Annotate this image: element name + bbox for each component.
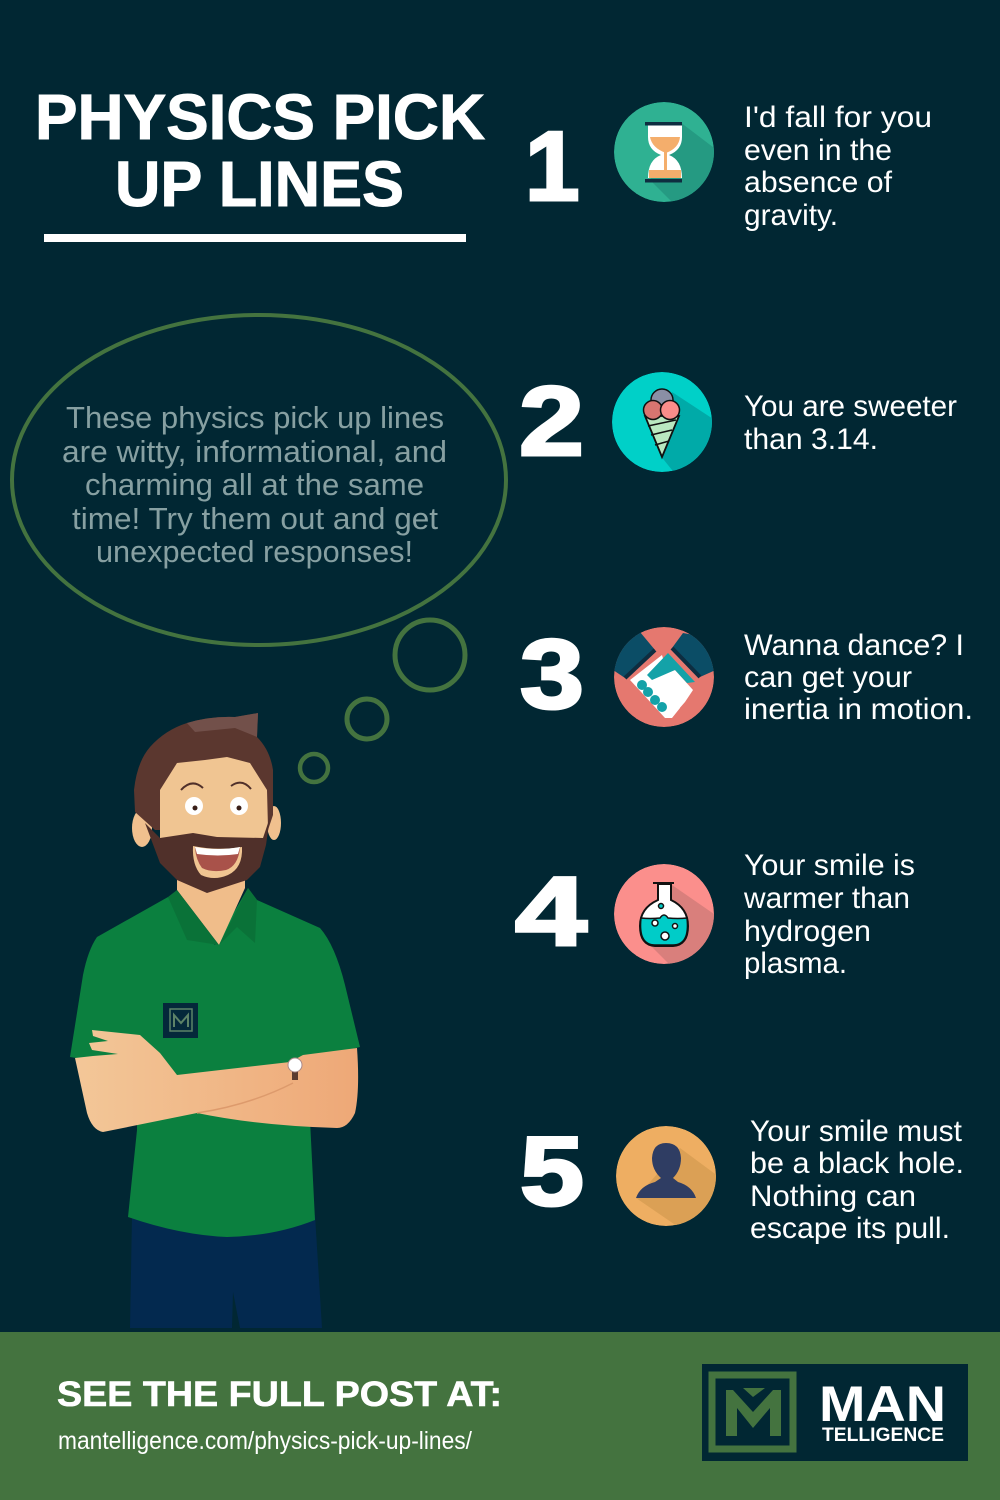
logo: TELLIGENCE: [822, 1425, 944, 1446]
number 3: 3: [520, 619, 584, 729]
shirt badge: [163, 1003, 198, 1038]
footer: [0, 1332, 1000, 1500]
text 3: [744, 629, 973, 726]
title: PHYSICS PICK: [35, 81, 485, 153]
ears: [132, 809, 152, 847]
bubble text: charming all at the same: [85, 467, 424, 502]
character: [70, 713, 360, 1328]
text 4: [743, 849, 915, 980]
watch: [288, 1058, 302, 1080]
text 5: [750, 1115, 964, 1245]
text 4: hydrogen: [744, 915, 871, 948]
bubble text: time! Try them out and get: [72, 501, 438, 536]
item 5: [520, 1115, 964, 1245]
bubble text: These physics pick up lines: [66, 400, 444, 435]
thought bubble: [12, 315, 506, 645]
text 5: Nothing can: [750, 1180, 916, 1213]
bubble text: [62, 400, 447, 569]
number 2: 2: [519, 366, 584, 476]
shirt: [70, 888, 360, 1237]
arm crease: [197, 1083, 293, 1113]
text 1: I'd fall for you: [744, 101, 932, 134]
mouth: [193, 846, 242, 878]
icon: ice cream: [612, 372, 712, 472]
text 3: Wanna dance? I: [744, 629, 964, 662]
text 3: can get your: [744, 661, 912, 694]
bubble text: are witty, informational, and: [62, 434, 447, 469]
text 4: Your smile is: [744, 849, 915, 882]
title: [35, 81, 485, 220]
item 3: [520, 619, 973, 729]
footer heading: SEE THE FULL POST AT:: [57, 1375, 502, 1414]
number 5: 5: [520, 1116, 584, 1226]
crossed arms: [75, 1030, 358, 1132]
icon: person silhouette: [616, 1126, 716, 1226]
title underline: [44, 234, 466, 242]
text 3: inertia in motion.: [744, 693, 973, 726]
text 1: [744, 101, 932, 232]
text 4: warmer than: [743, 882, 910, 915]
text 4: plasma.: [744, 947, 847, 980]
text 5: escape its pull.: [750, 1212, 950, 1245]
hair: [134, 713, 273, 830]
text 1: absence of: [744, 166, 893, 199]
collar: [168, 888, 257, 945]
text 5: be a black hole.: [750, 1147, 964, 1180]
eyes: [181, 783, 251, 815]
text 5: Your smile must: [750, 1115, 963, 1148]
text 2: than 3.14.: [744, 423, 878, 456]
item 2: [521, 372, 956, 472]
number 1: 1: [525, 111, 580, 221]
bubble text: unexpected responses!: [96, 534, 413, 569]
neck: [177, 865, 245, 945]
text 1: gravity.: [744, 199, 838, 232]
icon: handshake: [614, 627, 714, 727]
logo: MAN: [819, 1376, 946, 1432]
title: UP LINES: [115, 148, 404, 220]
text 2: [744, 390, 957, 456]
footer url: mantelligence.com/physics-pick-up-lines/: [58, 1427, 472, 1455]
text 2: You are sweeter: [744, 390, 957, 423]
logo: [702, 1364, 968, 1461]
thought circles: [300, 620, 465, 782]
item 4: [515, 849, 915, 980]
beard: [145, 817, 270, 893]
icon: flask: [614, 864, 714, 964]
face: [160, 757, 268, 850]
item 1: [525, 101, 932, 232]
number 4: 4: [515, 856, 587, 966]
pants: [130, 1215, 322, 1328]
text 1: even in the: [744, 134, 892, 167]
icon: hourglass: [614, 102, 714, 202]
